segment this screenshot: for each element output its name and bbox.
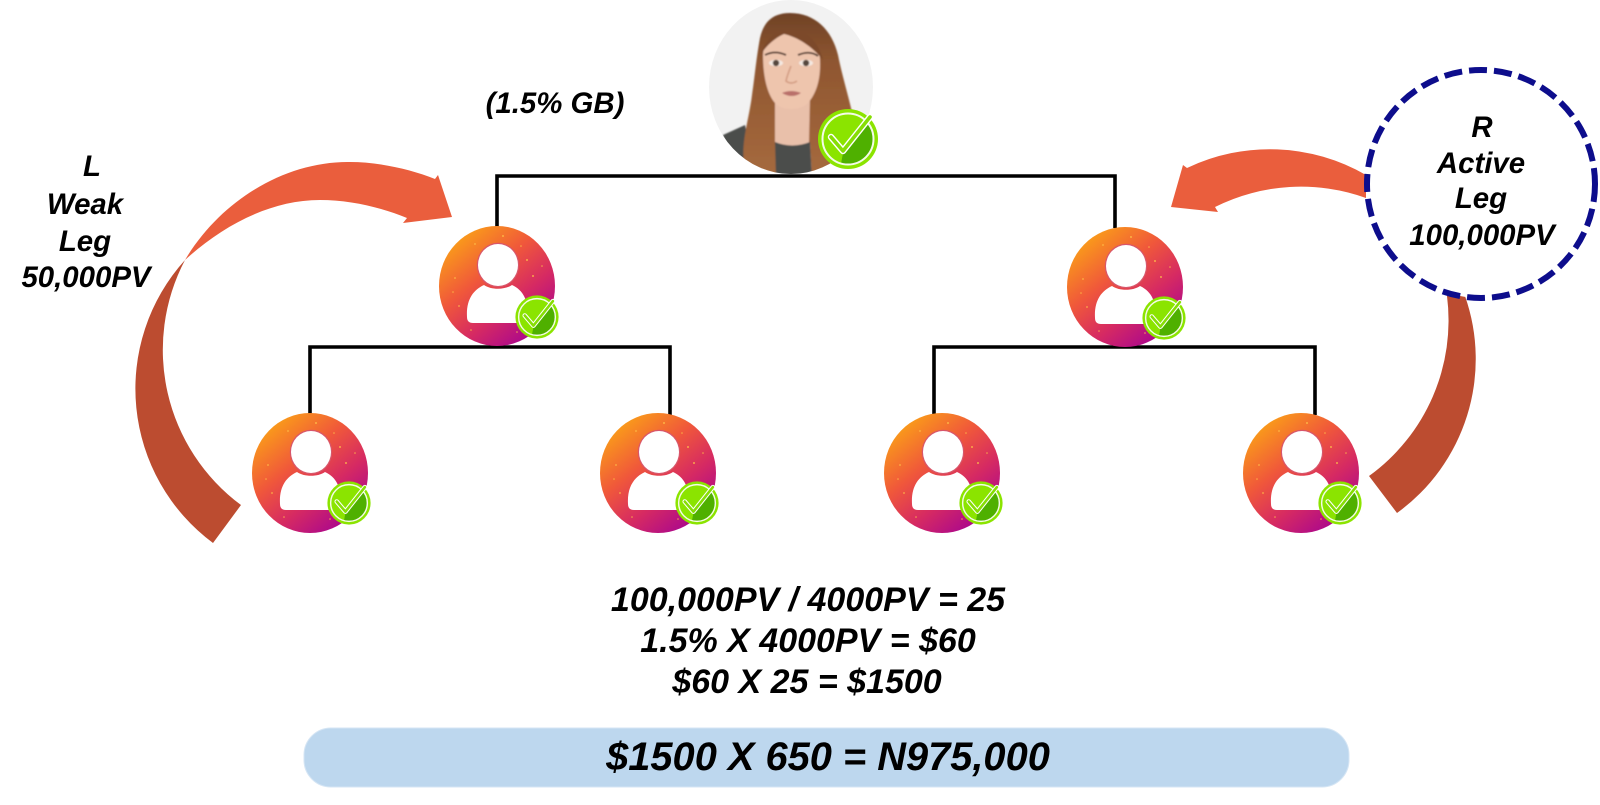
result pill: $1500 X 650 = N975,000 bbox=[605, 735, 1050, 779]
right leg label: R bbox=[1471, 111, 1493, 144]
right leg label: Leg bbox=[1455, 182, 1507, 215]
top member portrait bbox=[709, 0, 882, 178]
right leg label: Active bbox=[1436, 147, 1525, 180]
calculation text block bbox=[611, 581, 1006, 701]
right arrow: active leg upper arc bbox=[1171, 149, 1366, 212]
calculation text block: 1.5% X 4000PV = $60 bbox=[640, 622, 976, 660]
member node: level 1 right bbox=[1067, 227, 1188, 347]
left arrow: weak leg upper arc bbox=[185, 162, 452, 260]
calculation text block: 100,000PV / 4000PV = 25 bbox=[611, 581, 1006, 619]
left leg label: Leg bbox=[59, 225, 111, 258]
member node: level 1 left bbox=[439, 226, 561, 346]
member node: level 2 fourth bbox=[1243, 413, 1364, 533]
right leg label bbox=[1409, 111, 1557, 252]
right arrow: active leg lower arc bbox=[1369, 296, 1476, 513]
left leg label: L bbox=[83, 150, 101, 183]
left leg label bbox=[21, 150, 153, 294]
member node: level 2 first bbox=[252, 413, 373, 533]
dashed circle: right active leg bbox=[1367, 70, 1595, 298]
member node: level 2 third bbox=[884, 413, 1005, 533]
result pill bbox=[304, 728, 1349, 787]
left leg label: 50,000PV bbox=[21, 261, 153, 294]
org chart connector lines bbox=[310, 176, 1315, 415]
calculation text block: $60 X 25 = $1500 bbox=[671, 663, 942, 701]
left arrow: weak leg lower arc bbox=[135, 260, 241, 543]
left leg label: Weak bbox=[47, 188, 125, 221]
right leg label: 100,000PV bbox=[1409, 219, 1557, 252]
member node: level 2 second bbox=[600, 413, 721, 533]
group bonus percentage label: (1.5% GB) bbox=[486, 87, 624, 120]
portrait check badge bbox=[818, 109, 882, 173]
